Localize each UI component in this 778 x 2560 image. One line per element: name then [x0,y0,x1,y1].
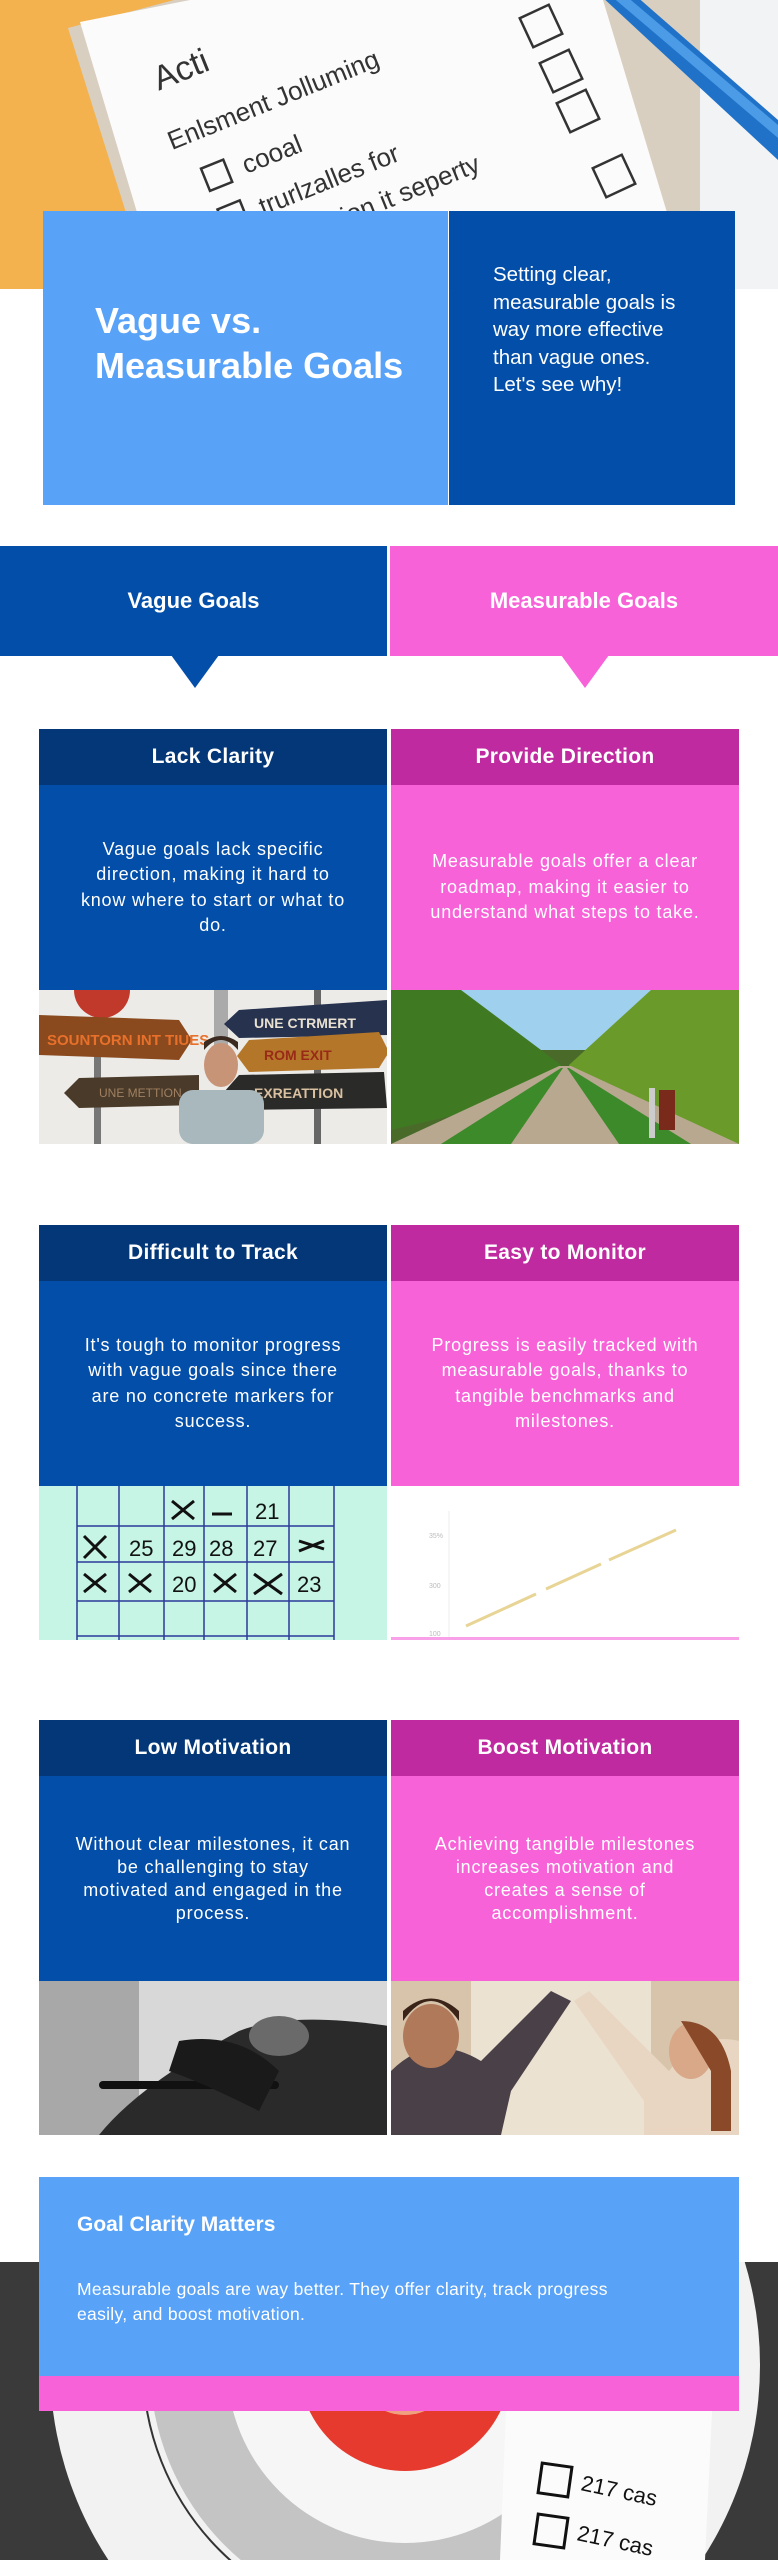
hero image: notebook checklist: trurlzalles for [254,138,404,221]
column header: vague goals: Vague Goals [127,588,260,613]
image: signposts: EXREATTION [254,1085,343,1101]
panel: boost motivation: Achieving tangible milestones increases motivation and creates a sense of accomplishment. [435,1834,695,1922]
image: line chart: 35% [429,1533,443,1540]
panel: easy to monitor [391,1225,739,1640]
image: tree-lined road [391,990,739,1144]
image: high five group [391,1981,739,2135]
background image: target board [0,2262,778,2560]
intro text: Setting clear, measurable goals is way more effective than vague ones. Let's see why! [493,263,675,396]
panel: lack clarity: Vague goals lack specific direction, making it hard to know where to start or what to do. [81,838,345,935]
hero image: notebook checklist: fee [349,228,394,269]
title: Measurable Goals [95,345,403,386]
panel: easy to monitor: Progress is easily tracked with measurable goals, thanks to tangible benchmarks and milestones. [432,1334,698,1431]
image: line chart: 300 [429,1583,441,1590]
hero image: notebook checklist: Enlsment Jolluming [163,43,383,156]
image: calendar: 25 [129,1536,153,1561]
note paper: 217 cas [579,2470,660,2511]
panel: low motivation [39,1720,387,2135]
conclusion box [39,2177,739,2411]
column header: measurable goals [390,546,778,688]
panel: boost motivation [391,1720,739,2135]
image: calendar: 21 [255,1499,279,1524]
panel: boost motivation: Boost Motivation [477,1736,653,1759]
panel: provide direction: Measurable goals offer a clear roadmap, making it easier to understand what steps to take. [430,851,700,922]
image: calendar: 28 [209,1536,233,1561]
image: calendar: 20 [172,1572,196,1597]
panel: lack clarity: Lack Clarity [152,745,274,768]
panel: provide direction: Provide Direction [476,745,654,768]
note paper: 217 cas [575,2520,656,2560]
note paper [500,2411,712,2560]
title [43,211,448,505]
panel: difficult to track: Difficult to Track [128,1241,298,1264]
image: signposts: ROM EXIT [264,1047,332,1063]
panel: difficult to track: It's tough to monitor progress with vague goals since there are no concrete markers for success. [85,1334,341,1431]
hero image: notebook checklist: Acti [148,42,214,98]
hero image: notebook checklist [0,0,778,289]
column header: vague goals [0,546,387,688]
image: calendar: 27 [253,1536,277,1561]
panel: low motivation: Without clear milestones, it can be challenging to stay motivated and engaged in the process. [76,1834,350,1922]
panel: lack clarity [39,729,387,1144]
image: signposts: UNE CTRMERT [254,1015,356,1031]
image: signposts [39,990,387,1144]
image: calendar: 23 [297,1572,321,1597]
title: Vague vs. [95,300,261,341]
panel: provide direction [391,729,739,1144]
panel: low motivation: Low Motivation [134,1736,292,1759]
conclusion heading: Goal Clarity Matters [77,2213,275,2236]
image: tired person in chair [39,1981,387,2135]
title block [43,211,735,505]
image: calendar [39,1486,387,1640]
panel: difficult to track [39,1225,387,1640]
image: signposts: UNE METTION [99,1086,182,1100]
hero image: notebook checklist: cooal [237,129,306,180]
hero image: notebook checklist: cocation it seperty [278,148,484,255]
pink footer strip [39,2376,739,2411]
column header: measurable goals: Measurable Goals [490,588,678,613]
intro text [449,211,735,505]
image: calendar: 29 [172,1536,196,1561]
image: line chart: 100 [429,1631,441,1638]
image: line chart [391,1511,739,1640]
image: signposts: SOUNTORN INT TIUES [47,1032,209,1049]
conclusion text: Measurable goals are way better. They offer clarity, track progress easily, and boost motivation. [77,2279,608,2324]
panel: easy to monitor: Easy to Monitor [484,1241,646,1264]
